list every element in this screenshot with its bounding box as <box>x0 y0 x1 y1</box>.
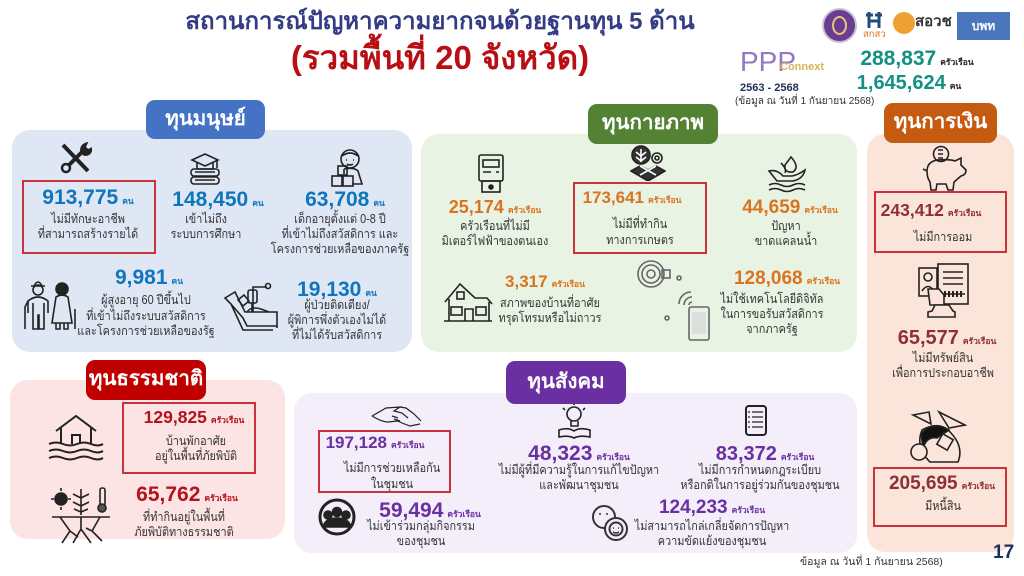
icon: helping hands <box>370 404 422 428</box>
text: elderly: และโครงการช่วยเหลือของรัฐ <box>77 324 215 338</box>
text: children: ที่เข้าไม่ถึงสวัสดิการ และ <box>282 227 398 241</box>
text: no group activity: ไม่เข้าร่วมกลุ่มกิจกรรม <box>367 519 475 533</box>
years: 2563 - 2568 <box>740 82 799 94</box>
text: patients <box>288 298 386 342</box>
icon: drought <box>50 486 112 546</box>
text: children <box>270 210 409 256</box>
text: patients: ผู้ป่วยติดเตียง/ <box>304 298 370 312</box>
text: no group activity: ของชุมชน <box>397 534 445 548</box>
text: no meter <box>442 217 548 248</box>
total households: 288,837 ครัวเรือน <box>860 47 974 70</box>
highlight box <box>573 182 707 254</box>
text: no digital tech: ไม่ใช้เทคโนโลยีดิจิทัล <box>721 292 823 306</box>
stat: 205,695: 205,695 ครัวเรือน <box>889 473 995 494</box>
text: no skills: ที่สามารถสร้างรายได้ <box>38 227 138 241</box>
stat: 197,128: 197,128 ครัวเรือน <box>326 433 424 452</box>
heading: natural capital <box>86 360 206 400</box>
text: water shortage: ขาดแคลนน้ำ <box>755 234 817 248</box>
highlight box <box>318 430 451 493</box>
heading: human capital: ทุนมนุษย์ <box>165 107 246 130</box>
text: no knowledgeable people <box>499 463 659 492</box>
stat: 243,412: 243,412 ครัวเรือน <box>881 200 981 220</box>
icon: electric meter <box>478 154 504 193</box>
text: no farmland: ไม่มีที่ทำกิน <box>613 217 667 231</box>
heading: human capital <box>146 100 265 139</box>
icon: flooded house <box>47 414 105 462</box>
icon: assets <box>918 263 969 318</box>
panel: financial capital <box>867 134 1014 552</box>
icon: land <box>630 145 666 181</box>
text: disaster land: ภัยพิบัติทางธรรมชาติ <box>134 525 234 539</box>
icon: digital <box>637 260 710 341</box>
heading: social capital: ทุนสังคม <box>527 370 605 393</box>
PPP Connext logo: PPP <box>740 46 796 77</box>
text: no digital tech <box>720 292 824 336</box>
total people: 1,645,624 คน <box>857 72 961 94</box>
icon: chat faces <box>591 504 629 542</box>
stat: 128,068: 128,068 ครัวเรือน <box>734 268 840 289</box>
heading: financial capital: ทุนการเงิน <box>894 110 987 133</box>
text: no education: ระบบการศึกษา <box>171 227 241 241</box>
heading: physical capital <box>588 104 718 144</box>
stat: 173,641: 173,641 ครัวเรือน <box>583 188 681 207</box>
footer note: ข้อมูล ณ วันที่ 1 กันยายน 2568) <box>800 556 943 568</box>
icon: water in hand <box>768 156 806 192</box>
text: water shortage: ปัญหา <box>771 219 801 233</box>
text: disaster home: บ้านพักอาศัย <box>166 434 226 448</box>
text: no assets: ไม่มีทรัพย์สิน <box>913 351 973 365</box>
highlight box <box>122 402 256 474</box>
icon: checklist <box>744 404 768 437</box>
text: no rules: ไม่มีการกำหนดกฎระเบียบ <box>699 463 821 477</box>
heading: social capital <box>506 361 626 404</box>
text: no rules: หรือกติในการอยู่ร่วมกันของชุมชน <box>680 478 840 492</box>
stat: 65,577: 65,577 ครัวเรือน <box>898 327 996 349</box>
text: no group activity <box>367 519 475 549</box>
text: no farmland: ทางการเกษตร <box>606 233 674 247</box>
stat: 63,708: 63,708 คน <box>305 188 385 211</box>
stat: 148,450: 148,450 คน <box>172 188 264 211</box>
text: no education: เข้าไม่ถึง <box>185 212 227 226</box>
icon: elderly couple <box>24 281 76 330</box>
text: house condition <box>498 294 602 326</box>
stat: 48,323: 48,323 ครัวเรือน <box>528 442 630 465</box>
PPP Connext logo: Connext <box>780 61 824 73</box>
text: no meter: ครัวเรือนที่ไม่มี <box>460 219 530 233</box>
stat: 44,659: 44,659 ครัวเรือน <box>742 197 838 218</box>
text: no mutual help <box>344 460 440 492</box>
text: no mutual help: ในชุมชน <box>371 477 413 491</box>
icon: child with blocks <box>331 149 364 187</box>
icon: tools <box>60 142 92 174</box>
stat: 9,981: 9,981 คน <box>115 266 183 289</box>
PPP Connext logo <box>740 46 824 77</box>
text: no knowledgeable people: ไม่มีผู้ที่มีความรู้ในการแก้ไขปัญหา <box>499 463 659 477</box>
text: no education <box>171 212 241 241</box>
text: children: โครงการช่วยเหลือของภาครัฐ <box>271 242 409 256</box>
text: no meter: มิเตอร์ไฟฟ้าของตนเอง <box>442 234 548 248</box>
text: disaster home: อยู่ในพื้นที่ภัยพิบัติ <box>155 449 237 463</box>
text: no farmland <box>606 215 674 247</box>
page number: 17 <box>993 542 1014 563</box>
text: children: เด็กอายุตั้งแต่ 0-8 ปี <box>294 212 386 226</box>
text: disaster home <box>155 434 237 464</box>
data date: (ข้อมูล ณ วันที่ 1 กันยายน 2568) <box>735 96 874 107</box>
text: disaster land <box>134 510 234 540</box>
icon: bulb and book <box>557 404 592 439</box>
text: house condition: ทรุดโทรมหรือไม่ถาวร <box>499 311 601 325</box>
text: no mutual help: ไม่มีการช่วยเหลือกัน <box>344 461 440 475</box>
text: elderly: ที่เข้าไม่ถึงระบบสวัสดิการ <box>86 308 206 322</box>
panel: natural capital <box>10 380 285 539</box>
icon: books <box>190 153 220 185</box>
text: no mediation <box>635 519 789 549</box>
text: patients: ที่ไม่ได้รับสวัสดิการ <box>292 328 382 342</box>
stat: 129,825: 129,825 ครัวเรือน <box>144 407 244 427</box>
stat: 25,174: 25,174 ครัวเรือน <box>449 197 541 217</box>
text: no savings: ไม่มีการออม <box>914 230 972 244</box>
icon: hospital bed <box>224 282 278 331</box>
icon: debt bag <box>910 410 967 463</box>
text: debt: มีหนี้สิน <box>925 499 961 513</box>
logos: สอวช <box>915 13 952 30</box>
stat: 59,494: 59,494 ครัวเรือน <box>379 499 481 522</box>
logos: บพท <box>972 19 995 33</box>
stat: 124,233: 124,233 ครัวเรือน <box>659 497 765 518</box>
text: elderly: ผู้สูงอายุ 60 ปีขึ้นไป <box>101 293 191 307</box>
text: water shortage <box>755 219 817 248</box>
text: no skills: ไม่มีทักษะอาชีพ <box>51 212 125 226</box>
text: no digital tech: จากภาครัฐ <box>746 322 798 336</box>
title: สถานการณ์ปัญหาความยากจนด้วยฐานทุน 5 ด้าน <box>185 8 695 35</box>
text: no assets <box>892 350 994 380</box>
stat: 913,775: 913,775 คน <box>42 186 134 209</box>
icon: piggy bank <box>922 146 967 191</box>
text: no digital tech: ในการขอรับสวัสดิการ <box>721 307 823 321</box>
highlight box: savings <box>874 191 1007 253</box>
highlight box: debt <box>873 467 1007 527</box>
highlight box <box>22 180 156 254</box>
logos <box>822 8 1010 43</box>
stat: 65,762: 65,762 ครัวเรือน <box>136 483 238 506</box>
subtitle: (รวมพื้นที่ 20 จังหวัด) <box>291 39 589 76</box>
icon: house <box>444 282 492 322</box>
text: no assets: เพื่อการประกอบอาชีพ <box>892 366 994 380</box>
text: elderly <box>77 290 215 338</box>
panel: human capital <box>12 130 412 352</box>
stat: 19,130: 19,130 คน <box>297 278 377 301</box>
stat: 83,372: 83,372 ครัวเรือน <box>716 443 814 465</box>
text: no mediation: ความขัดแย้งของชุมชน <box>658 534 766 548</box>
heading: physical capital: ทุนกายภาพ <box>602 111 704 134</box>
text: no rules <box>680 463 840 492</box>
text: house condition: สภาพของบ้านที่อาศัย <box>500 296 600 310</box>
text: no knowledgeable people: และพัฒนาชุมชน <box>539 478 619 492</box>
panel: social capital <box>294 393 857 553</box>
heading: natural capital: ทุนธรรมชาติ <box>89 367 203 390</box>
panel: physical capital <box>421 134 857 352</box>
stat: 3,317: 3,317 ครัวเรือน <box>505 272 585 291</box>
text: disaster land: ที่ทำกินอยู่ในพื้นที่ <box>143 510 225 524</box>
text: patients: ผู้พิการพึ่งตัวเองไม่ได้ <box>288 313 386 327</box>
text: no mediation: ไม่สามารถไกล่เกลี่ยจัดการปัญหา <box>635 519 789 533</box>
icon: no groups <box>317 497 357 537</box>
text: no skills <box>38 212 138 241</box>
logos: สกสว <box>863 29 886 40</box>
heading: financial capital <box>884 103 997 143</box>
